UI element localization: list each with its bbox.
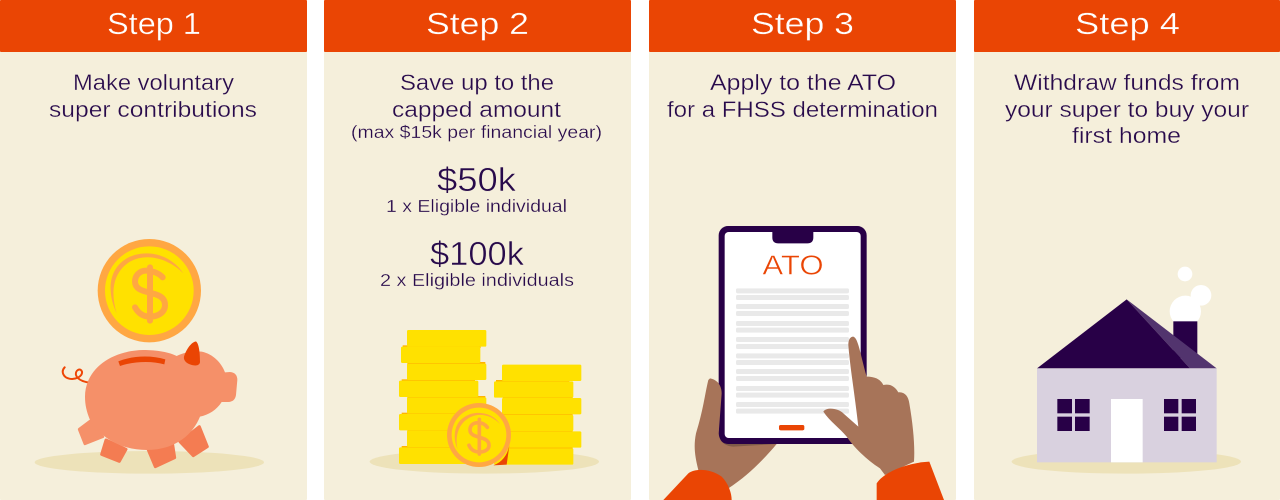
text: step 1 description: Make voluntary xyxy=(73,70,234,95)
text: step 3 description: for a FHSS determination xyxy=(667,97,938,122)
text: step 2 description: Save up to the xyxy=(400,70,554,95)
panel: step 3 xyxy=(649,0,956,500)
heading: step 1 xyxy=(0,0,307,52)
stat: $100k xyxy=(380,235,574,290)
icon: tablet held by hands: ATO xyxy=(762,250,824,281)
text: step 3 description: Apply to the ATO xyxy=(710,70,896,95)
icon: tablet held by hands xyxy=(663,226,944,500)
text: step 2 description: capped amount xyxy=(392,97,561,122)
stat: $100k: 2 x Eligible individuals xyxy=(380,270,574,290)
stat: $50k: 1 x Eligible individual xyxy=(386,196,567,216)
icon: house with smoke xyxy=(1012,267,1241,474)
stat: $50k: $50k xyxy=(437,161,517,198)
text: step 2 description: (max $15k per financial year) xyxy=(351,122,602,142)
heading: step 4 xyxy=(974,0,1280,52)
text: step 2 description xyxy=(351,70,602,142)
heading: step 4: Step 4 xyxy=(1075,6,1180,41)
heading: step 1: Step 1 xyxy=(107,6,201,41)
text: step 4 description: first home xyxy=(1072,123,1181,148)
text: step 4 description: Withdraw funds from xyxy=(1014,70,1240,95)
heading: step 2 xyxy=(324,0,631,52)
icon: piggy bank with coin xyxy=(35,239,264,474)
panel: step 4 xyxy=(974,0,1280,500)
text: step 3 description xyxy=(667,70,938,122)
icon: coin stacks xyxy=(370,330,599,474)
heading: step 2: Step 2 xyxy=(426,6,529,41)
text: step 1 description xyxy=(49,70,257,122)
text: step 4 description: your super to buy your xyxy=(1005,97,1249,122)
panel: step 1 xyxy=(0,0,307,500)
heading: step 3 xyxy=(649,0,956,52)
stat: $100k: $100k xyxy=(430,235,525,272)
text: step 4 description xyxy=(1005,70,1249,148)
heading: step 3: Step 3 xyxy=(751,6,854,41)
panel: step 2 xyxy=(324,0,631,500)
text: step 1 description: super contributions xyxy=(49,97,257,122)
stat: $50k xyxy=(386,161,567,216)
